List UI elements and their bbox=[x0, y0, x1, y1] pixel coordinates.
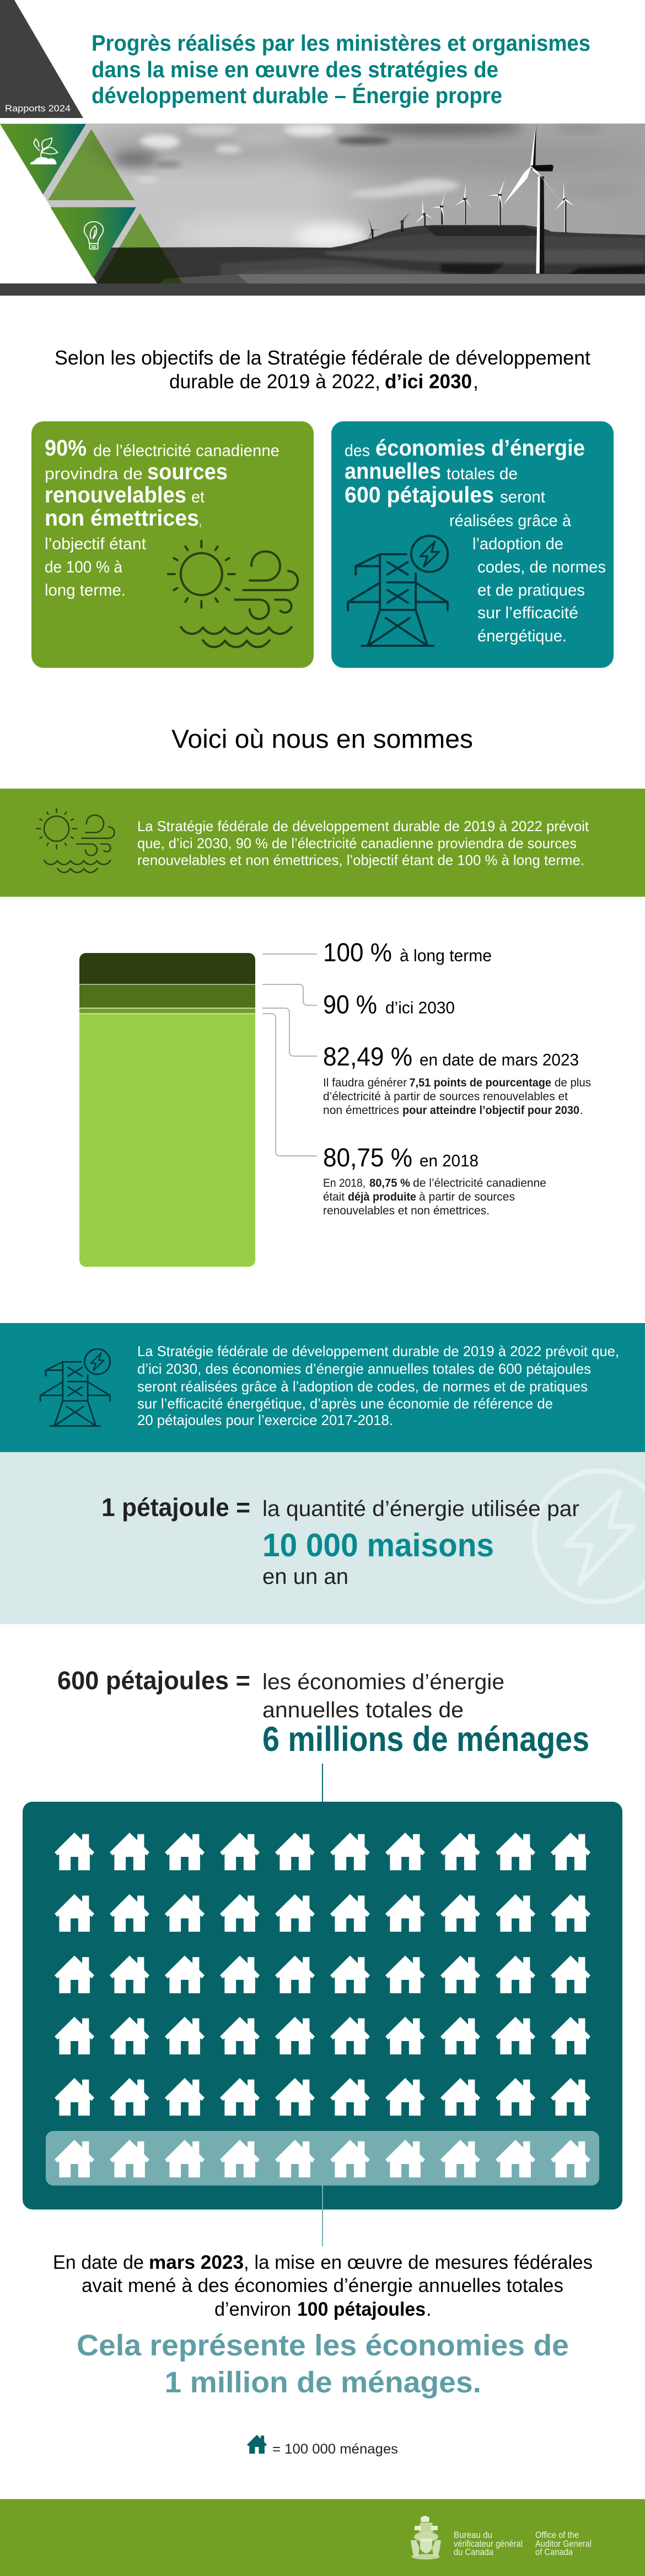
panel: renewable electricity goal bbox=[31, 421, 314, 668]
band text: La Stratégie fédérale de développement durable de 2019 à 2022 prévoit bbox=[137, 818, 589, 834]
label: 80,75 %: en 2018 bbox=[420, 1151, 479, 1170]
text: in one year: en un an bbox=[262, 1565, 348, 1589]
decorative triangle: plant bbox=[0, 124, 86, 195]
panel text: non émettrices bbox=[45, 505, 199, 531]
title: Progrès réalisés par les ministères et organismes bbox=[92, 30, 590, 56]
leader lines bbox=[262, 954, 317, 1156]
band text: 20 pétajoules pour l’exercice 2017-2018. bbox=[137, 1412, 393, 1428]
callout: one million households: Cela représente les économies de bbox=[77, 2329, 569, 2362]
label: 100 %: à long terme bbox=[400, 946, 492, 965]
label: 90 % bbox=[323, 989, 455, 1019]
panel text: économies d’énergie bbox=[375, 435, 585, 460]
text: quantity of energy: la quantité d’énergie utilisée par bbox=[262, 1497, 579, 1521]
icon: light bulb with leaf bbox=[84, 222, 103, 249]
band: renewable electricity bbox=[0, 789, 645, 897]
panel text: provindra de bbox=[45, 465, 143, 483]
label: 100 %: 100 % bbox=[323, 938, 392, 967]
highlight: achieved savings row bbox=[46, 2131, 599, 2186]
callout: one million households: 1 million de ménages. bbox=[164, 2366, 481, 2399]
intro heading bbox=[55, 346, 590, 393]
text block: 2030 gap: Il faudra générer bbox=[323, 1076, 407, 1089]
ground bbox=[55, 225, 645, 283]
band text bbox=[137, 818, 589, 868]
organization name: French: du Canada bbox=[454, 2547, 493, 2557]
text block: march 2023 result: En date de bbox=[53, 2252, 144, 2273]
stacked bar chart bbox=[79, 953, 255, 1267]
organization name: French: vérificateur général bbox=[454, 2538, 523, 2549]
panel text: sources bbox=[147, 459, 228, 484]
panel text: de l’électricité canadienne bbox=[93, 442, 280, 460]
panel text: totales de bbox=[447, 465, 518, 483]
icon: seedling bbox=[31, 138, 58, 164]
title: développement durable – Énergie propre bbox=[92, 83, 502, 108]
text block: 2030 gap: d’électricité à partir de sources renouvelables et bbox=[323, 1090, 568, 1103]
text block: 2030 gap: de plus bbox=[555, 1076, 591, 1089]
panel text: énergétique. bbox=[477, 627, 567, 645]
label: 82,49 % bbox=[323, 1042, 579, 1071]
panel text: et de pratiques bbox=[477, 581, 585, 599]
label: Rapports 2024: Rapports 2024 bbox=[5, 103, 71, 114]
large turbine bbox=[536, 176, 544, 274]
panel text: , bbox=[199, 511, 202, 529]
text block: 2030 gap: pour atteindre l’objectif pour 2030 bbox=[402, 1104, 579, 1117]
organization name: French bbox=[454, 2530, 523, 2557]
connector line to result text bbox=[322, 2186, 323, 2246]
decorative triangle: green overlay on clouds bbox=[48, 129, 135, 200]
intro heading: , bbox=[473, 370, 479, 393]
footer band bbox=[0, 2499, 645, 2576]
decorative triangle: green overlay on hills bbox=[97, 213, 182, 283]
text block: 2018 status: En 2018, bbox=[323, 1176, 366, 1190]
icon: power tower bbox=[40, 1349, 110, 1426]
icon: coat of arms bbox=[411, 2516, 441, 2559]
panel text: sur l’efficacité bbox=[477, 604, 578, 622]
panel text: renouvelables bbox=[45, 482, 186, 507]
text block: 2018 status: était bbox=[323, 1190, 345, 1203]
text: 600 petajoules definition: 6 millions de ménages bbox=[262, 1720, 589, 1759]
panel text: de 100 % à bbox=[45, 558, 122, 576]
organization name: English: of Canada bbox=[535, 2547, 573, 2557]
panel text bbox=[345, 435, 606, 645]
dark bar below photo bbox=[0, 283, 645, 296]
icon: power tower bbox=[348, 536, 448, 646]
band text: renouvelables et non émettrices, l’objectif étant de 100 % à long terme. bbox=[137, 851, 584, 868]
panel text: et bbox=[191, 488, 205, 506]
text: 600 petajoules definition: annuelles totales de bbox=[262, 1698, 464, 1722]
panel text bbox=[45, 435, 280, 599]
band text: La Stratégie fédérale de développement durable de 2019 à 2022 prévoit que, bbox=[137, 1343, 619, 1359]
title bbox=[92, 30, 590, 108]
text: 1 petajoule: 1 pétajoule = bbox=[101, 1493, 250, 1522]
panel text: des bbox=[345, 442, 370, 460]
text block: march 2023 result: , la mise en œuvre de mesures fédérales bbox=[244, 2252, 593, 2273]
text block: march 2023 result bbox=[53, 2252, 593, 2320]
text block: march 2023 result: 100 pétajoules bbox=[297, 2299, 426, 2320]
icon: sun, wind and water bbox=[36, 808, 114, 872]
panel text: l’adoption de bbox=[472, 535, 563, 553]
icon: faint lightning bolt bbox=[534, 1471, 645, 1602]
panel text: 600 pétajoules bbox=[345, 482, 494, 507]
band text: sur l’efficacité énergétique, d’après une économie de référence de bbox=[137, 1395, 553, 1412]
intro heading: Selon les objectifs de la Stratégie fédérale de développement bbox=[55, 346, 590, 369]
organization name: English bbox=[535, 2530, 592, 2557]
text block: 2018 status: 80,75 % bbox=[369, 1176, 410, 1190]
text block: 2018 status: de l’électricité canadienne bbox=[413, 1176, 546, 1190]
text block: march 2023 result: . bbox=[426, 2299, 432, 2320]
text block: march 2023 result: d’environ bbox=[214, 2299, 291, 2320]
panel: energy savings goal bbox=[331, 421, 614, 668]
label: 82,49 %: en date de mars 2023 bbox=[420, 1050, 579, 1069]
legend: house equals 100 000 households bbox=[247, 2435, 398, 2457]
text block: march 2023 result: avait mené à des économies d’énergie annuelles totales bbox=[82, 2275, 563, 2296]
band: energy savings bbox=[0, 1323, 645, 1452]
text block: 2030 gap bbox=[323, 1076, 591, 1117]
text block: 2018 status: renouvelables et non émettrices. bbox=[323, 1204, 490, 1217]
text block: 2018 status bbox=[323, 1176, 546, 1217]
organization name: English: Office of the bbox=[535, 2530, 579, 2540]
text block: 2018 status: à partir de sources bbox=[419, 1190, 515, 1203]
label: 80,75 % bbox=[323, 1143, 479, 1172]
panel: 1 petajoule definition bbox=[0, 1452, 645, 1624]
small and large turbines bbox=[368, 124, 574, 274]
banner photo: wind turbines on a prairie bbox=[0, 120, 645, 283]
text block: 2018 status: déjà produite bbox=[348, 1190, 416, 1203]
label: 90 %: d’ici 2030 bbox=[385, 998, 455, 1017]
organization name: French: Bureau du bbox=[454, 2530, 492, 2540]
intro heading: durable de 2019 à 2022, bbox=[169, 370, 380, 393]
label: 90 %: 90 % bbox=[323, 989, 377, 1019]
text block: 2030 gap: non émettrices bbox=[323, 1104, 399, 1117]
panel: house pictogram grid bbox=[23, 1802, 622, 2209]
icon: sun, wind and water bbox=[168, 541, 298, 647]
band text: que, d’ici 2030, 90 % de l’électricité canadienne proviendra de sources bbox=[137, 835, 577, 851]
text block: march 2023 result: mars 2023 bbox=[149, 2252, 244, 2273]
panel text: réalisées grâce à bbox=[449, 512, 571, 530]
decorative triangle: bulb bbox=[50, 207, 136, 279]
section heading: Voici où nous en sommes bbox=[171, 724, 473, 753]
legend: house equals 100 000 households: = 100 000 ménages bbox=[272, 2441, 398, 2457]
organization name: English: Auditor General bbox=[535, 2538, 592, 2549]
connector line to house grid bbox=[322, 1764, 323, 1802]
text block: 2030 gap: 7,51 points de pourcentage bbox=[409, 1076, 551, 1089]
band text bbox=[137, 1343, 619, 1428]
label: 82,49 %: 82,49 % bbox=[323, 1042, 412, 1071]
houses: 60 icons bbox=[55, 1833, 590, 2177]
panel text: long terme. bbox=[45, 581, 126, 599]
title: dans la mise en œuvre des stratégies de bbox=[92, 57, 498, 82]
panel text: seront bbox=[500, 488, 546, 506]
label: 80,75 %: 80,75 % bbox=[323, 1143, 412, 1172]
panel text: 90% bbox=[45, 435, 87, 460]
text: 10 000 homes: 10 000 maisons bbox=[262, 1527, 494, 1563]
panel text: l’objectif étant bbox=[45, 535, 147, 553]
text: 600 petajoules definition bbox=[57, 1666, 589, 1759]
text: 600 petajoules definition: 600 pétajoules = bbox=[57, 1666, 250, 1695]
panel text: codes, de normes bbox=[477, 558, 606, 576]
header: report label wedge bbox=[0, 0, 83, 118]
band text: d’ici 2030, des économies d’énergie annuelles totales de 600 pétajoules bbox=[137, 1361, 591, 1377]
text block: 2030 gap: . bbox=[580, 1104, 583, 1117]
intro heading: d’ici 2030 bbox=[385, 370, 472, 393]
panel text: annuelles bbox=[345, 458, 441, 484]
band text: seront réalisées grâce à l’adoption de codes, de normes et de pratiques bbox=[137, 1378, 588, 1395]
callout: one million households bbox=[77, 2329, 569, 2399]
text: 600 petajoules definition: les économies d’énergie bbox=[262, 1670, 504, 1694]
white notch between photo and page bbox=[0, 124, 97, 283]
label: 100 % bbox=[323, 938, 492, 967]
